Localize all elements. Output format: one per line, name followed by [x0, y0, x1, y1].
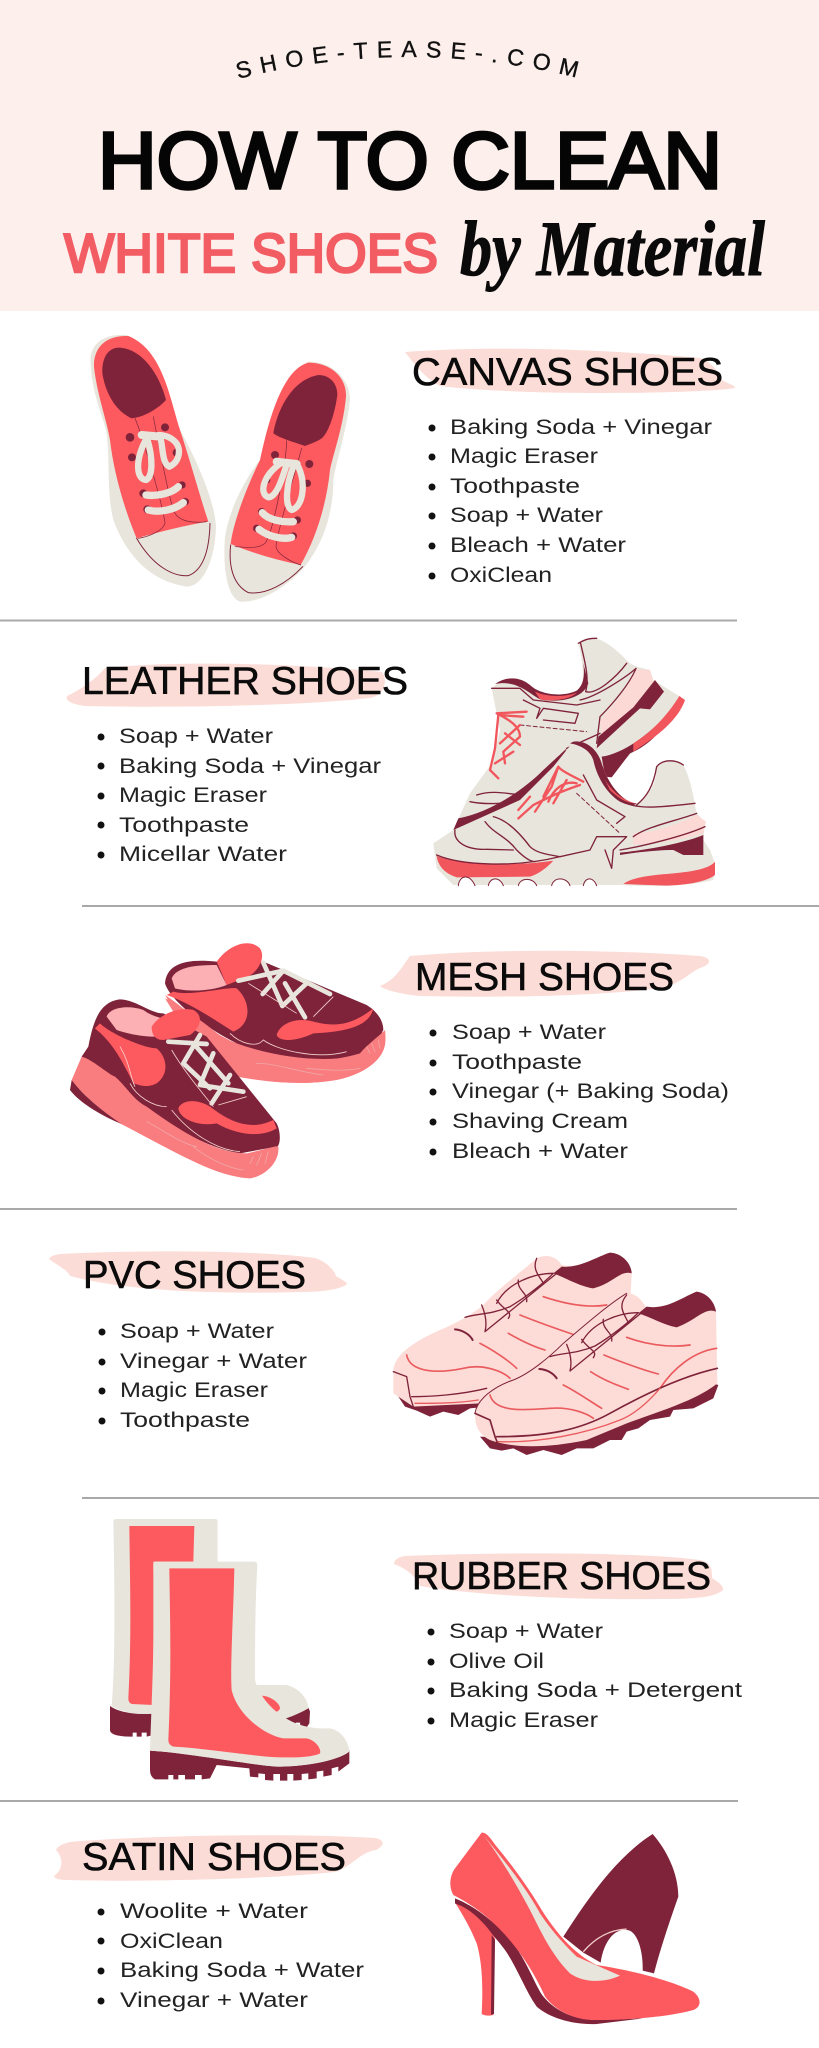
list: satin cleaning methods: Vinegar + Water	[120, 1988, 308, 2012]
icon: rubber boots	[110, 1519, 349, 1781]
list: pvc cleaning methods: Toothpaste	[120, 1408, 250, 1432]
heading: canvas shoes: CANVAS SHOES	[412, 351, 723, 394]
section: leather shoes	[67, 638, 715, 886]
list: mesh cleaning methods: Bleach + Water	[452, 1139, 628, 1163]
list: leather cleaning methods: Toothpaste	[119, 813, 249, 837]
list: leather cleaning methods: Soap + Water	[119, 724, 273, 748]
list: rubber cleaning methods: Soap + Water	[449, 1619, 603, 1643]
list: mesh cleaning methods: Shaving Cream	[452, 1109, 628, 1133]
heading: mesh shoes: MESH SHOES	[415, 956, 674, 999]
list: satin cleaning methods: OxiClean	[120, 1929, 223, 1953]
list: canvas cleaning methods: OxiClean	[450, 563, 552, 587]
list: leather cleaning methods: Micellar Water	[119, 842, 287, 866]
heading: rubber shoes: RUBBER SHOES	[412, 1555, 711, 1598]
list: pvc cleaning methods: Magic Eraser	[120, 1378, 268, 1402]
list: pvc cleaning methods	[98, 1319, 307, 1432]
list: satin cleaning methods: Baking Soda + Water	[120, 1958, 364, 1982]
site name: SHOE-TEASE-.COM	[236, 40, 579, 78]
list: rubber cleaning methods: Olive Oil	[449, 1649, 544, 1673]
list: canvas cleaning methods: Baking Soda + Vinegar	[450, 415, 712, 439]
heading: pvc shoes: PVC SHOES	[83, 1254, 306, 1297]
list: pvc cleaning methods: Vinegar + Water	[120, 1349, 307, 1373]
header panel	[0, 0, 819, 311]
list: mesh cleaning methods	[430, 1020, 729, 1163]
list: rubber cleaning methods: Magic Eraser	[449, 1708, 598, 1732]
list: canvas cleaning methods: Magic Eraser	[450, 444, 598, 468]
list: rubber cleaning methods	[428, 1619, 742, 1732]
icon: pvc shoes	[393, 1253, 718, 1455]
list: mesh cleaning methods: Vinegar (+ Baking Soda)	[452, 1079, 729, 1103]
list: leather cleaning methods: Magic Eraser	[119, 783, 267, 807]
list: leather cleaning methods	[98, 724, 381, 866]
subtitle: white shoes: WHITE SHOES	[64, 222, 438, 284]
icon: satin high heels	[450, 1833, 700, 2024]
section: pvc shoes	[49, 1251, 718, 1455]
list: canvas cleaning methods: Bleach + Water	[450, 533, 626, 557]
list: mesh cleaning methods: Soap + Water	[452, 1020, 606, 1044]
list: canvas cleaning methods	[428, 415, 712, 587]
icon: canvas shoes	[91, 335, 350, 602]
list: mesh cleaning methods: Toothpaste	[452, 1050, 582, 1074]
list: satin cleaning methods: Woolite + Water	[120, 1899, 308, 1923]
list: canvas cleaning methods: Soap + Water	[450, 503, 603, 527]
icon: mesh shoes	[70, 943, 385, 1178]
title: HOW TO CLEAN	[98, 116, 722, 205]
list: pvc cleaning methods: Soap + Water	[120, 1319, 274, 1343]
list: leather cleaning methods: Baking Soda + Vinegar	[119, 754, 381, 778]
heading: satin shoes: SATIN SHOES	[82, 1836, 346, 1879]
icon: leather shoes	[433, 638, 715, 886]
list: canvas cleaning methods: Toothpaste	[450, 474, 580, 498]
section: mesh shoes	[70, 943, 729, 1178]
heading: leather shoes: LEATHER SHOES	[82, 660, 408, 703]
section: satin shoes	[54, 1833, 700, 2024]
list: satin cleaning methods	[98, 1899, 364, 2012]
section: rubber shoes	[110, 1519, 742, 1781]
section: canvas shoes	[91, 335, 735, 602]
list: rubber cleaning methods: Baking Soda + Detergent	[449, 1678, 742, 1702]
